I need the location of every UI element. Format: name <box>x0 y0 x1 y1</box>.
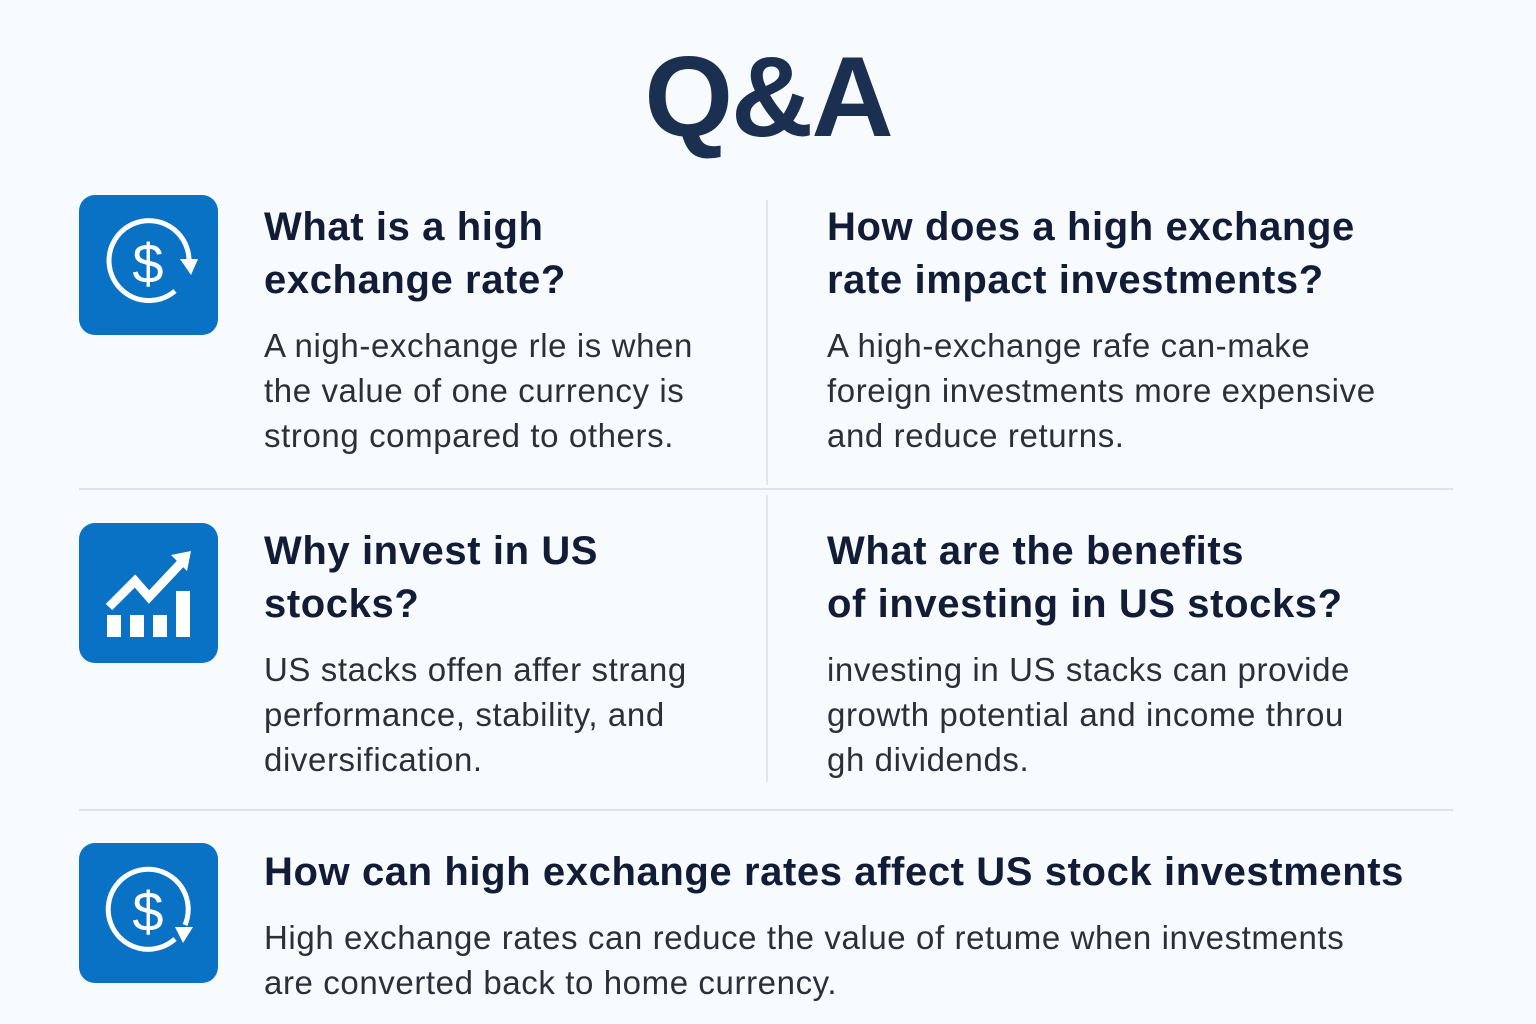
Q1 body: A nigh-exchange rle is when <box>264 327 693 364</box>
Q5 body: High exchange rates can reduce the value of retume when investments <box>264 919 1344 956</box>
Q4 heading: of investing in US stocks? <box>827 582 1343 626</box>
Q1 heading <box>264 205 566 302</box>
Q3 body <box>264 651 687 778</box>
Q3 body: US stacks offen affer strang <box>264 651 687 688</box>
Q4 body: gh dividends. <box>827 741 1029 778</box>
Q2 heading: How does a high exchange <box>827 205 1355 249</box>
Q1 body: the value of one currency is <box>264 372 684 409</box>
icon: growth chart <box>79 523 218 663</box>
Q2 body <box>827 327 1376 454</box>
Q4 body <box>827 651 1350 778</box>
Q3 heading: stocks? <box>264 582 419 626</box>
Q1 heading: What is a high <box>264 205 544 249</box>
Q1 body: strong compared to others. <box>264 417 674 454</box>
Q3 body: diversification. <box>264 741 483 778</box>
Q1 heading: exchange rate? <box>264 258 566 302</box>
title: Q&A <box>644 34 892 161</box>
Q2 body: A high-exchange rafe can-make <box>827 327 1310 364</box>
Q4 heading <box>827 529 1343 626</box>
Q4 body: investing in US stacks can provide <box>827 651 1350 688</box>
Q1 body <box>264 327 693 454</box>
Q2 body: foreign investments more expensive <box>827 372 1376 409</box>
Q4 heading: What are the benefits <box>827 529 1244 573</box>
icon: currency exchange 1: $ <box>132 232 164 295</box>
Q5 body <box>264 919 1344 1001</box>
Q3 heading <box>264 529 598 626</box>
Q5 heading: How can high exchange rates affect US stock investments <box>264 850 1404 894</box>
Q3 heading: Why invest in US <box>264 529 598 573</box>
Q5 body: are converted back to home currency. <box>264 964 837 1001</box>
Q4 body: growth potential and income throu <box>827 696 1344 733</box>
Q2 heading <box>827 205 1355 302</box>
icon: currency exchange 2: $ <box>132 880 164 943</box>
icon: currency exchange 1 <box>79 195 218 335</box>
Q2 body: and reduce returns. <box>827 417 1125 454</box>
Q2 heading: rate impact investments? <box>827 258 1324 302</box>
Q3 body: performance, stability, and <box>264 696 665 733</box>
icon: currency exchange 2 <box>79 843 218 983</box>
